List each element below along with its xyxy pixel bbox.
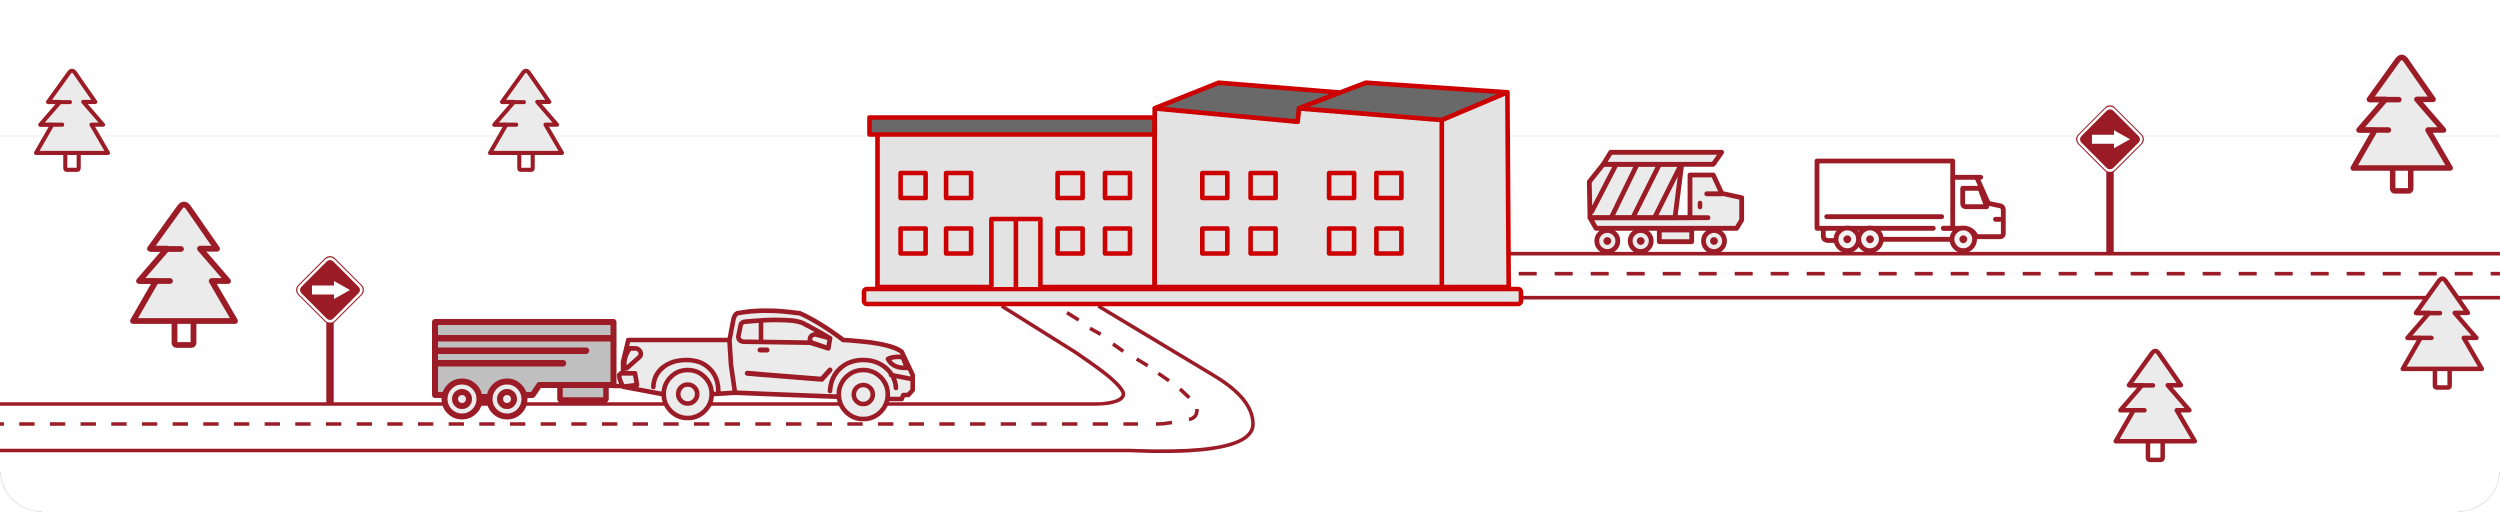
road sign: left (293, 253, 367, 404)
factory building (864, 83, 1521, 304)
left wing roof (870, 118, 1154, 134)
centre block wall (1155, 108, 1442, 287)
tree: top right large (2353, 57, 2450, 191)
tree: left large (133, 204, 235, 345)
trailer axle link (478, 394, 492, 404)
pickup truck (619, 311, 913, 419)
chassis line (1823, 228, 1976, 240)
road: lower left winding road (0, 306, 1253, 451)
trailer wheels (444, 382, 524, 416)
right side wall (1442, 92, 1509, 287)
windows (901, 173, 1401, 254)
cab window (738, 320, 830, 348)
tree: right over road (2403, 279, 2482, 388)
box truck wheels (1836, 228, 1975, 251)
dump truck (1589, 152, 1742, 252)
tree: top left small (36, 71, 108, 170)
road: upper right straight road (1500, 254, 2500, 298)
dump bed (1589, 164, 1682, 218)
entrance door (991, 219, 1040, 287)
left wing wall (878, 130, 1154, 287)
tree: top centre-left small (490, 71, 562, 170)
door handle (760, 348, 767, 352)
pickup body (623, 311, 913, 399)
rear bumper (619, 373, 637, 387)
dump truck wheels (1597, 230, 1724, 252)
cab window (1963, 188, 1987, 207)
cab marker (1698, 203, 1702, 207)
dump bed stripes (1590, 167, 1722, 218)
tail light (624, 348, 641, 368)
side mirror (810, 334, 830, 348)
dump bed lid (1603, 152, 1722, 164)
cab outline (1953, 177, 2003, 237)
road sign: right (2073, 103, 2147, 254)
window divider (759, 322, 763, 340)
tree: bottom right (2116, 351, 2195, 460)
hitch bar (613, 384, 624, 388)
cargo box (1817, 161, 1953, 228)
dump truck lower box (1659, 230, 1692, 242)
trailer tow box (560, 385, 606, 400)
foundation slab (864, 289, 1521, 304)
front trim (891, 375, 912, 379)
faint bottom corner arcs (0, 472, 2500, 512)
first sawtooth roof (1155, 83, 1340, 122)
faint horizon line (0, 135, 2500, 137)
box truck (1817, 161, 2003, 251)
cab marker (1996, 217, 2000, 222)
second sawtooth roof (1299, 83, 1507, 120)
wheel arches (653, 360, 896, 391)
headlight (888, 357, 907, 368)
trailer body (435, 322, 614, 397)
cargo line (1827, 214, 1942, 219)
dump truck chassis and hood (1590, 175, 1742, 228)
pickup wheels (664, 370, 888, 419)
trailer stripes (436, 338, 612, 363)
cab door line (730, 341, 735, 393)
trailer (435, 322, 624, 416)
side trim line (747, 370, 830, 379)
